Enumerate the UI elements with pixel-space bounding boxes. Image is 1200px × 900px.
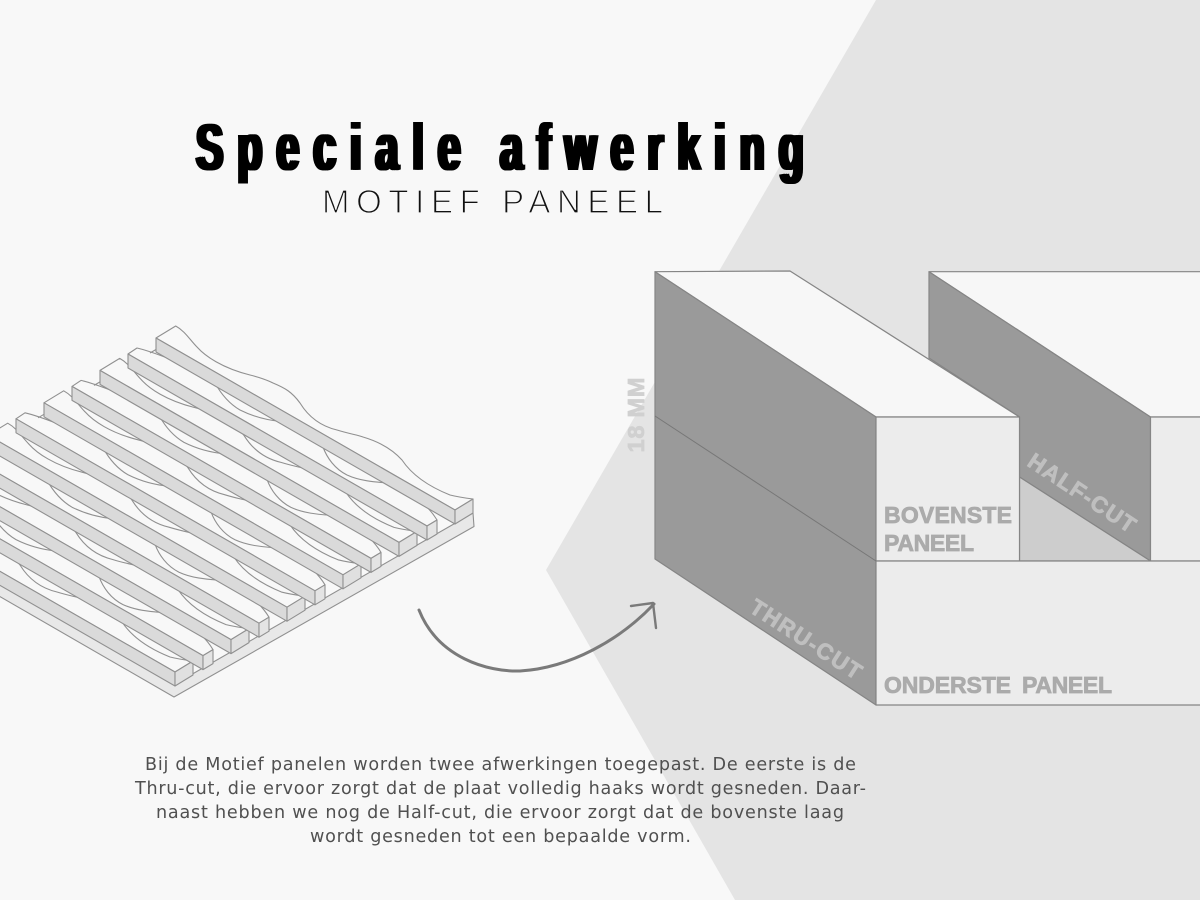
title: Speciale afwerking	[196, 110, 818, 184]
label: onderste paneel: PANEEL	[1022, 672, 1112, 698]
upper panel front	[876, 417, 1020, 561]
thru-cut dark face	[655, 272, 876, 705]
label: thru-cut: THRU-CUT	[745, 594, 867, 685]
half-cut dark face	[929, 272, 1150, 561]
label: onderste paneel: ONDERSTE	[884, 672, 1011, 698]
subtitle: MOTIEF PANEEL	[322, 183, 663, 220]
body text: Bij de Motief panelen worden twee afwerkingen toegepast. De eerste is de	[145, 755, 856, 775]
label: half-cut: HALF-CUT	[1023, 448, 1141, 538]
arrow: from panel to detail	[419, 603, 656, 671]
right top panel face	[1150, 417, 1200, 561]
top face	[655, 271, 1020, 417]
illustration: motief panel isometric	[0, 326, 474, 697]
label: bovenste paneel	[884, 502, 1012, 556]
label: bovenste paneel: BOVENSTE	[884, 502, 1012, 528]
label: onderste paneel	[884, 672, 1112, 698]
layer seam	[655, 416, 876, 561]
body text: naast hebben we nog de Half-cut, die ervoor zorgt dat de bovenste laag	[156, 803, 844, 823]
back top face	[929, 272, 1200, 417]
body text: Thru-cut, die ervoor zorgt dat de plaat volledig haaks wordt gesneden. Daar-	[134, 779, 866, 799]
label: 18 mm: 18 MM	[623, 378, 649, 452]
body text	[134, 755, 866, 847]
lower panel front	[876, 561, 1200, 705]
label: bovenste paneel: PANEEL	[884, 530, 974, 556]
base plate	[0, 513, 474, 697]
background grey hexagon	[546, 0, 1200, 900]
body text: wordt gesneden tot een bepaalde vorm.	[310, 827, 691, 847]
half-cut floor	[1020, 477, 1150, 561]
detail: cut-away block	[655, 271, 1200, 705]
slats	[0, 326, 473, 686]
